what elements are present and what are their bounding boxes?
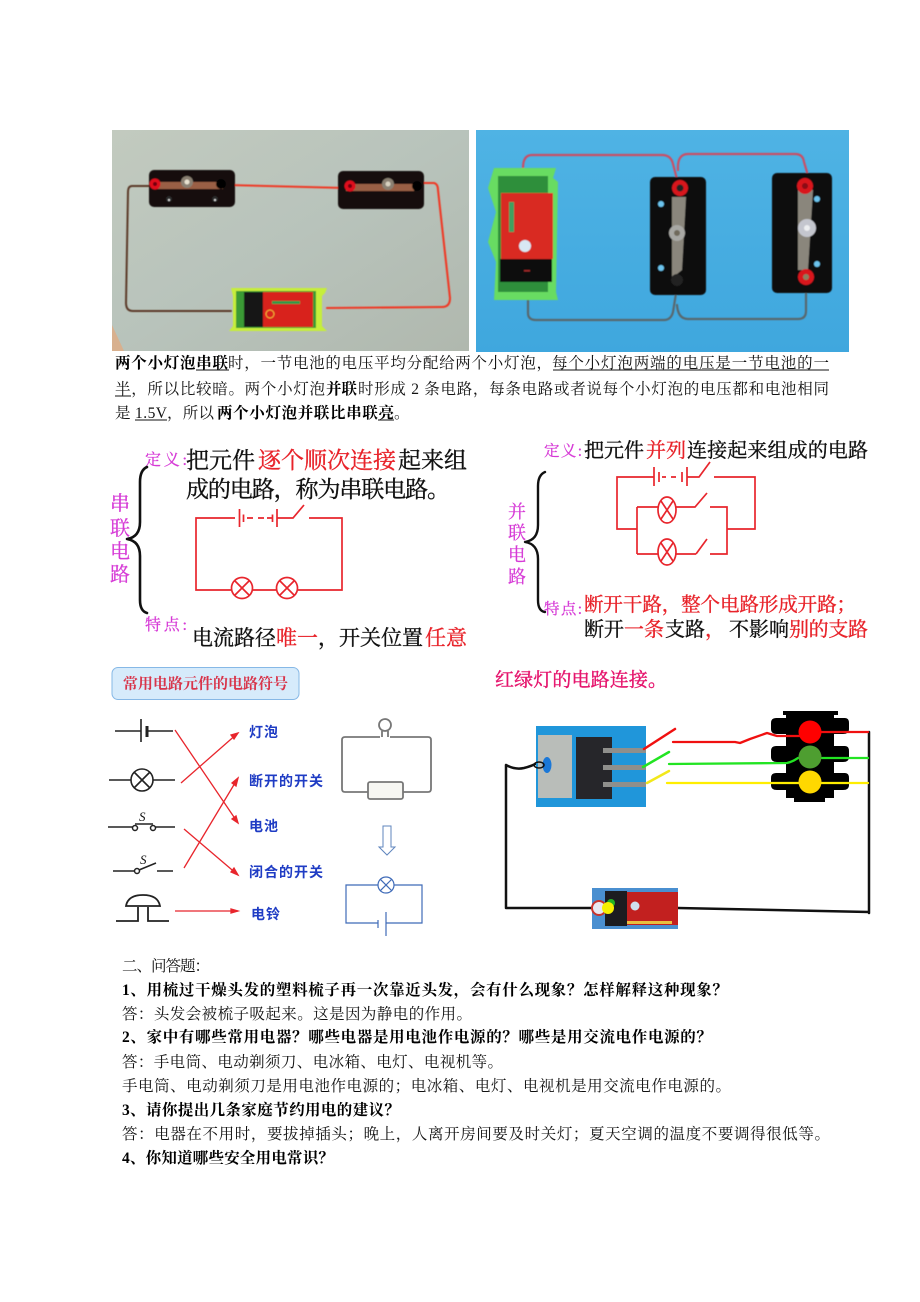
panel: series circuit definition xyxy=(110,448,467,651)
panel: circuit symbols xyxy=(108,668,431,936)
definition text line two: 成的电路，称为串联电路。 xyxy=(186,477,450,503)
definition text xyxy=(584,439,868,462)
bulb board two xyxy=(772,173,832,293)
definition text line one: 逐个顺次连接 xyxy=(258,448,397,473)
wires: grey xyxy=(528,283,806,320)
battery holder xyxy=(488,168,558,300)
brace xyxy=(127,467,147,613)
wire: red links xyxy=(228,183,450,308)
answer two line two: 手电筒、电动剃须刀是用电池作电源的；电冰箱、电灯、电视机是用交流电作电源的。 xyxy=(122,1077,731,1095)
definition text line one: 把元件 xyxy=(186,448,255,473)
text block: explanation paragraph: 并联 xyxy=(326,379,357,398)
text block: explanation paragraph: ，所以 xyxy=(167,404,215,422)
question one: 1、用梳过干燥头发的塑料梳子再一次靠近头发，会有什么现象？怎样解释这种现象？ xyxy=(122,980,728,1000)
features text line two xyxy=(584,618,868,641)
battery holder xyxy=(229,288,327,331)
bulb board one xyxy=(650,177,706,295)
parallel circuit diagram xyxy=(617,462,755,565)
matching arrows xyxy=(175,730,238,913)
circuit diagram: symbols xyxy=(346,877,422,936)
text block: explanation paragraph: 两个小灯泡串联 xyxy=(115,353,228,372)
label: definition: 定义: xyxy=(544,442,582,460)
section heading: 二、问答题： xyxy=(122,957,210,975)
answer three: 答：电器在不用时，要拔掉插头；晚上，人离开房间要及时关灯；夏天空调的温度不要调得很低等。 xyxy=(122,1124,830,1143)
photo: series circuit xyxy=(112,130,469,351)
features text line two: 一条 xyxy=(624,618,664,641)
wire: brown return xyxy=(126,186,231,311)
definition text: 连接起来组成的电路 xyxy=(687,439,868,462)
transistor photo xyxy=(534,726,646,807)
vertical label: 路 xyxy=(508,567,526,587)
question three: 3、请你提出几条家庭节约用电的建议？ xyxy=(122,1100,400,1119)
text block: questions and answers xyxy=(122,957,830,1167)
question four: 4、你知道哪些安全用电常识？ xyxy=(122,1148,334,1167)
features text line one: 断开干路，整个电路形成开路； xyxy=(584,594,856,616)
question two: 2、家中有哪些常用电器？哪些电器是用电池作电源的？哪些是用交流电作电源的？ xyxy=(122,1027,712,1046)
bulb board two xyxy=(338,171,424,209)
photo: parallel circuit xyxy=(476,130,849,352)
heading box: 常用电路元件的电路符号 xyxy=(123,674,288,692)
text block: explanation paragraph: 时形成 2 条电路，每条电路或者说每个小灯泡的电压都和电池相同 xyxy=(358,380,829,398)
battery xyxy=(592,888,678,929)
symbol: closed switch: S xyxy=(139,809,146,824)
label: features: 特点: xyxy=(544,600,582,618)
features text line two: 支路 xyxy=(665,618,705,641)
features text line two: 别的支路 xyxy=(789,618,868,641)
text block: explanation paragraph: 两个小灯泡并联比串联亮 xyxy=(217,403,394,422)
label: definition: 定义: xyxy=(145,451,187,469)
switches xyxy=(643,729,675,783)
traffic light xyxy=(667,711,868,802)
symbol: closed switch xyxy=(108,809,175,830)
features text: 唯一 xyxy=(276,626,318,650)
features text line two: 断开 xyxy=(584,618,624,641)
label: battery: 电池 xyxy=(249,818,278,834)
vertical label: 联 xyxy=(110,517,130,540)
text block: explanation paragraph: 。 xyxy=(394,405,410,422)
panel: parallel circuit definition xyxy=(508,439,868,641)
vertical label xyxy=(508,502,526,587)
features text line two: ， xyxy=(705,619,725,641)
label: features: 特点: xyxy=(145,616,187,634)
lamp wires xyxy=(667,732,868,783)
answer one: 答：头发会被梳子吸起来。这是因为静电的作用。 xyxy=(122,1005,472,1023)
wires: red xyxy=(523,154,807,183)
heading box xyxy=(112,668,299,700)
definition text: 并列 xyxy=(646,439,686,462)
text block: explanation paragraph: 每个小灯泡两端的电压是一节电池的一 xyxy=(552,354,829,372)
vertical label: 电 xyxy=(508,545,526,565)
vertical label xyxy=(110,492,130,586)
text block: explanation paragraph: 时，一节电池的电压平均分配给两个小灯泡， xyxy=(228,354,552,372)
features text: ，开关位置 xyxy=(318,626,423,651)
symbol: bulb xyxy=(109,769,175,791)
label: bulb: 灯泡 xyxy=(249,724,278,740)
symbol: bell xyxy=(116,895,169,921)
vertical label: 联 xyxy=(508,523,526,543)
label: open switch: 断开的开关 xyxy=(249,773,323,789)
text block: explanation paragraph: 是 xyxy=(115,404,131,422)
answer two line one: 答：手电筒、电动剃须刀、电冰箱、电灯、电视机等。 xyxy=(122,1053,503,1071)
symbol: battery xyxy=(115,719,173,742)
series circuit diagram xyxy=(196,505,342,598)
definition text: 把元件 xyxy=(584,439,644,462)
brace xyxy=(525,472,545,612)
features text xyxy=(192,626,467,651)
panel: traffic light circuit xyxy=(495,669,869,929)
arrow: down xyxy=(379,826,395,855)
black circuit wire xyxy=(506,732,869,913)
definition text line one: 起来组 xyxy=(398,448,467,473)
symbol: open switch: S xyxy=(140,852,147,867)
vertical label: 电 xyxy=(110,540,130,563)
label: closed switch: 闭合的开关 xyxy=(249,864,323,880)
vertical label: 串 xyxy=(110,492,130,515)
vertical label: 路 xyxy=(110,563,130,586)
vertical label: 并 xyxy=(508,502,526,522)
text block: explanation paragraph: 1.5V xyxy=(135,405,168,422)
real-style circuit sketch xyxy=(342,719,431,799)
features text: 电流路径 xyxy=(192,626,276,650)
features text line two: 不影响 xyxy=(729,618,789,641)
bulb board one xyxy=(149,170,235,207)
text block: explanation paragraph xyxy=(115,353,829,422)
heading: 红绿灯的电路连接。 xyxy=(495,669,667,691)
symbol: open switch xyxy=(113,852,173,874)
label: bell: 电铃 xyxy=(251,906,280,922)
definition text line one xyxy=(186,448,467,473)
features text: 任意 xyxy=(425,626,467,650)
text block: explanation paragraph: 半，所以比较暗。两个小灯泡 xyxy=(115,380,325,398)
